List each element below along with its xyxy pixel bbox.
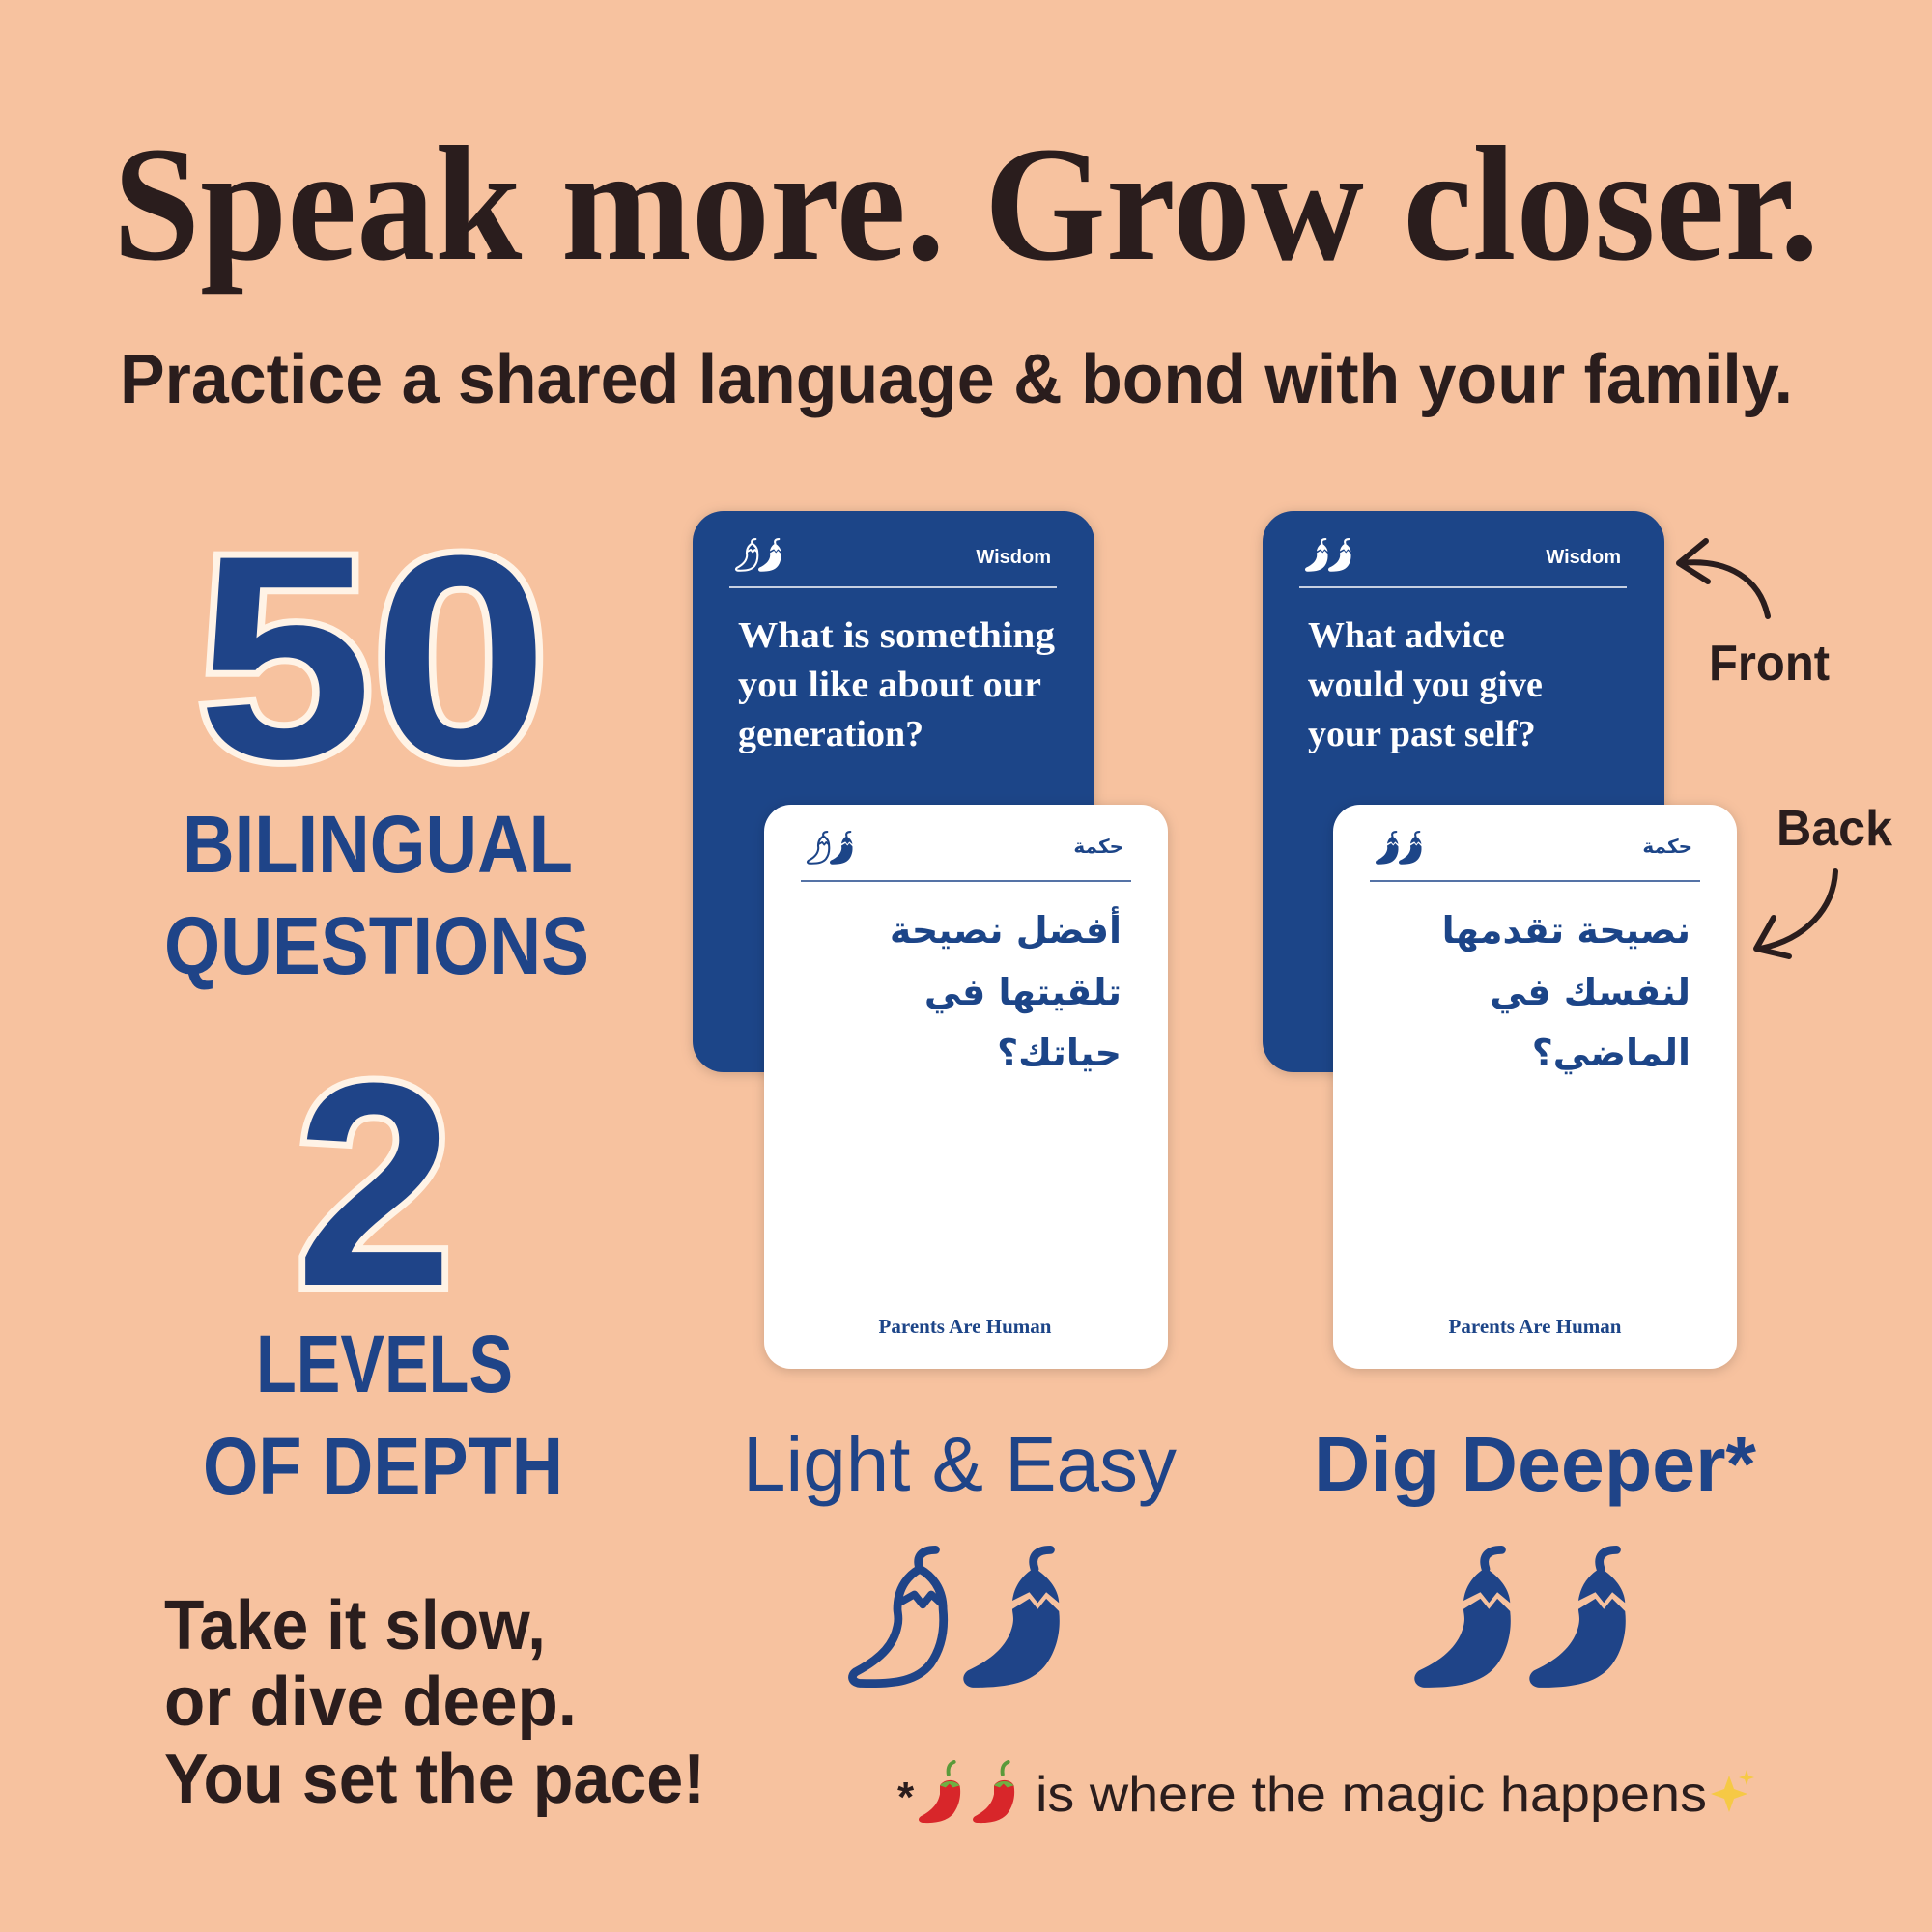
stat: 2 levels of depth: LEVELS <box>256 1319 513 1409</box>
card: back arabic <box>1333 805 1737 1369</box>
card: front english: Wisdom <box>976 547 1051 568</box>
card pair: light & easy <box>693 511 1168 1369</box>
stat: 2 levels of depth <box>203 1022 563 1512</box>
footnote <box>897 1762 1754 1823</box>
stat: 50 bilingual questions: 50 <box>197 495 549 819</box>
card: front english: generation? <box>738 714 923 754</box>
label: back with arrow <box>1756 801 1892 956</box>
card pair: dig deeper <box>1263 511 1737 1369</box>
icon: chilis deep (two filled) <box>1414 1549 1626 1688</box>
card: back arabic: حياتك؟ <box>997 1032 1122 1074</box>
card: back arabic: لنفسك في <box>1490 971 1690 1013</box>
card: front english: What advice <box>1308 615 1505 656</box>
card: front english: Wisdom <box>1546 547 1621 568</box>
footnote: * <box>897 1774 915 1821</box>
pace text <box>164 1587 705 1818</box>
stat: 50 bilingual questions <box>164 495 589 991</box>
stat: 50 bilingual questions: BILINGUAL <box>183 799 573 890</box>
card: front english <box>1263 511 1664 1072</box>
pace text: or dive deep. <box>164 1663 577 1741</box>
icon: chilis light (one outline, one filled) <box>852 1549 1060 1688</box>
card: back arabic: أفضل نصيحة <box>890 906 1122 952</box>
label: front with arrow <box>1679 541 1830 692</box>
card: back arabic <box>764 805 1168 1369</box>
card: back arabic: حكمة <box>1073 835 1123 858</box>
card: front english: your past self? <box>1308 714 1536 754</box>
pace text: You set the pace! <box>164 1741 705 1818</box>
level label: dig deeper: Dig Deeper* <box>1314 1421 1757 1507</box>
stat: 2 levels of depth: OF DEPTH <box>203 1421 563 1512</box>
card: back arabic: Parents Are Human <box>879 1315 1052 1338</box>
card: back arabic: الماضي؟ <box>1532 1032 1690 1074</box>
card: back arabic: حكمة <box>1642 835 1692 858</box>
card: front english: would you give <box>1308 665 1543 705</box>
label: back with arrow: Back <box>1776 801 1892 857</box>
card: front english: you like about our <box>738 665 1041 705</box>
level label: light & easy: Light & Easy <box>743 1421 1177 1507</box>
card: front english <box>693 511 1094 1072</box>
stat: 2 levels of depth: 2 <box>296 1022 453 1347</box>
card: front english: What is something <box>738 615 1055 656</box>
pace text: Take it slow, <box>164 1587 546 1664</box>
label: front with arrow: Front <box>1709 636 1830 692</box>
footnote: is where the magic happens <box>1036 1767 1707 1823</box>
subtitle: Practice a shared language & bond with your family. <box>120 341 1793 418</box>
card: back arabic: تلقيتها في <box>924 971 1122 1013</box>
stat: 50 bilingual questions: QUESTIONS <box>164 900 589 991</box>
title: Speak more. Grow closer. <box>113 113 1819 295</box>
card: back arabic: نصيحة تقدمها <box>1442 909 1690 952</box>
card: back arabic: Parents Are Human <box>1449 1315 1622 1338</box>
